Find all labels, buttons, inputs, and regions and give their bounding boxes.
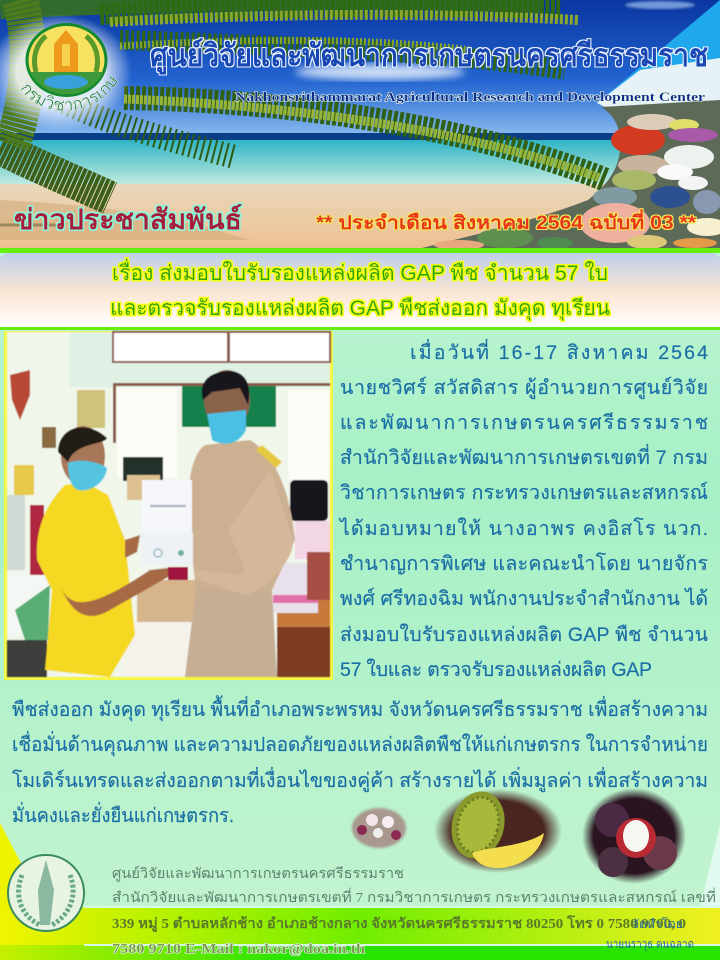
fruit: durian (434, 785, 562, 873)
article body beside photo: และพัฒนาการเกษตรนครศรีธรรมราช (340, 412, 708, 434)
footer contact text: ศูนย์วิจัยและพัฒนาการเกษตรนครศรีธรรมราช (112, 865, 404, 882)
beach scene (0, 0, 720, 248)
pebbles (422, 100, 720, 250)
footer contact text (112, 865, 716, 957)
article body beside photo: 57 ใบและ ตรวจรับรองแหล่งผลิต GAP (340, 658, 652, 681)
footer contact text: 7580 9710 E-Mail : nakor@doa.in.th (112, 942, 365, 957)
article body beside photo: นายชวิศร์ สวัสดิสาร ผู้อำนวยการศูนย์วิจัย (340, 376, 708, 400)
issue date: ** ประจำเดือน สิงหาคม 2564 ฉบับที่ 03 ** (316, 209, 697, 234)
title line 1: เรื่อง ส่งมอบใบรับรองแหล่งผลิต GAP พืช จำนวน 57 ใบ (112, 258, 608, 285)
footer contact text: 339 หมู่ 5 ตำบลหลักช้าง อำเภอช้างกลาง จังหวัดนครศรีธรรมราช 80250 โทร 0 7580 9700, 0 (112, 914, 686, 932)
press release label: ข่าวประชาสัมพันธ์ (14, 204, 242, 235)
footer background (0, 823, 720, 960)
article body beside photo: ส่งมอบใบรับรองแหล่งผลิต GAP พืช จำนวน (340, 623, 708, 646)
footer contact text: สำนักวิจัยและพัฒนาการเกษตรเขตที่ 7 กรมวิชาการเกษตร กระทรวงเกษตรและสหกรณ์ เลขที่ (112, 888, 716, 906)
article body full width: โมเดิร์นเทรดและส่งออกตามที่เงื่อนไขของคู่ค้า สร้างรายได้ เพิ่มมูลค่า เพื่อสร้างความ (12, 767, 708, 793)
article body beside photo: สำนักวิจัยและพัฒนาการเกษตรเขตที่ 7 กรม (340, 444, 708, 469)
article body beside photo: เมื่อวันที่ 16-17 สิงหาคม 2564 (410, 339, 708, 364)
DOA seal (8, 855, 84, 931)
author credit (606, 917, 694, 952)
woman (37, 482, 135, 677)
header banner (0, 0, 720, 248)
article body beside photo: ชำนาญการพิเศษ และคณะนำโดย นายจักร (340, 552, 708, 575)
title line 2: และตรวจรับรองแหล่งผลิต GAP พืชส่งออก มังคุด ทุเรียน (110, 297, 610, 321)
author credit: นายนราวุธ คนฉลาด (606, 937, 694, 952)
article body full width (12, 695, 708, 827)
fruit: mangosteen (582, 788, 686, 884)
article body beside photo: วิชาการเกษตร กระทรวงเกษตรและสหกรณ์ (340, 481, 708, 504)
author credit: จัดทำโดย (632, 917, 683, 931)
article body full width: พืชส่งออก มังคุด ทุเรียน พื้นที่อำเภอพระพรหม จังหวัดนครศรีธรรมราช เพื่อสร้างความ (12, 695, 708, 722)
palm fronds (0, 0, 606, 225)
article body beside photo: พงศ์ ศรีทองฉิม พนักงานประจำสำนักงาน ได้ (340, 587, 708, 610)
man (185, 440, 295, 677)
fruit: longkong (352, 808, 406, 848)
article body full width: มั่นคงและยั่งยืนแก่เกษตรกร. (12, 802, 234, 827)
certificate (142, 480, 192, 534)
photo: certificate handover (4, 331, 333, 680)
center English name: Nakhonsrithammarat Agricultural Research and Development Center (235, 89, 705, 104)
article body full width: เชื่อมั่นด้านคุณภาพ และความปลอดภัยของแหล่งผลิตพืชให้แก่เกษตรกร ในการจำหน่าย (12, 731, 708, 757)
title panel (0, 248, 720, 330)
article body beside photo: ได้มอบหมายให้ นางอาพร คงอิสโร นวก. (338, 517, 708, 540)
article body beside photo (338, 339, 708, 681)
